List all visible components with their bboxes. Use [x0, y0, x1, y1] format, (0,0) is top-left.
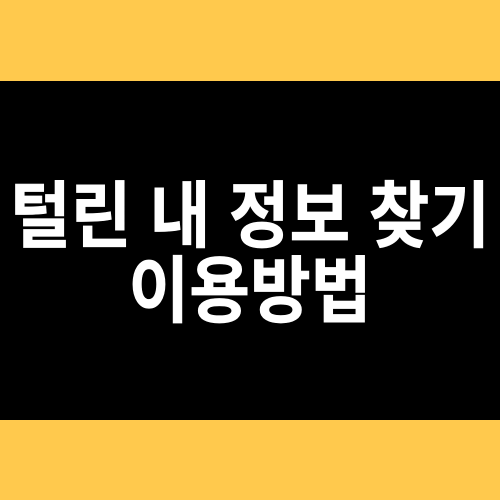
title: [10, 175, 490, 332]
title line 1: 털린 내 정보 찾기: [10, 175, 490, 257]
title line 2: 이용방법: [129, 250, 371, 332]
top yellow band: [0, 0, 500, 81]
bottom yellow band: [0, 420, 500, 500]
